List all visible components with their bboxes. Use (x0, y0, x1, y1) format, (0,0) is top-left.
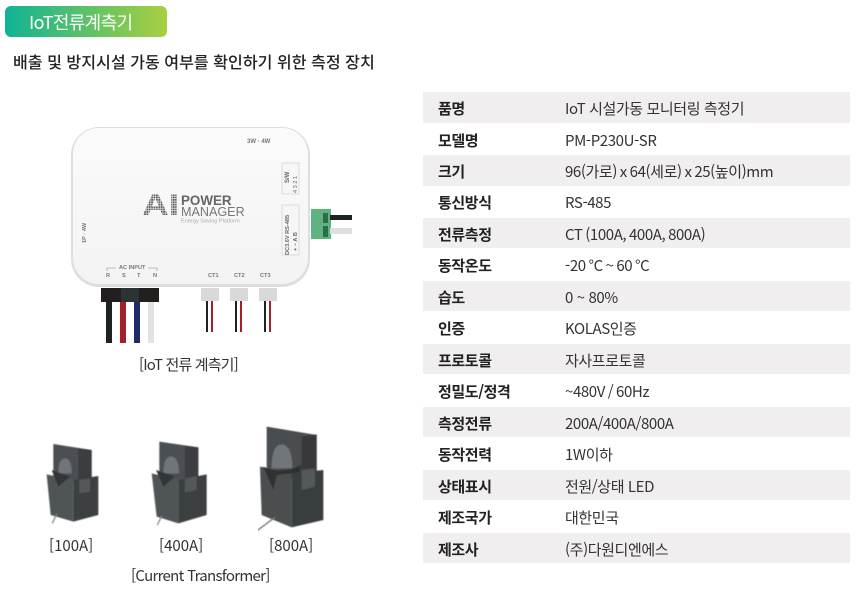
illustration: IoT current meter device: 1P · 4W (82, 222, 88, 243)
row: manufacturer: (주)다원디엔에스 (565, 538, 668, 560)
illustration: IoT current meter device: AI (142, 189, 179, 222)
caption: current transformer: [Current Transformer] (131, 565, 270, 586)
row: country of manufacture (438, 507, 619, 528)
row: certification: 인증 (438, 318, 465, 339)
row: measuring current (423, 407, 850, 437)
row: model: 모델명 (438, 130, 478, 150)
row: accuracy and rating (438, 381, 650, 402)
row: status display (423, 470, 850, 500)
row: operating power (438, 444, 612, 465)
icon: 400A current transformer (151, 441, 208, 526)
row: communication (438, 192, 611, 213)
illustration: IoT current meter device: + − A B (293, 232, 299, 251)
row: current measurement: 전류측정 (438, 224, 492, 245)
row: communication: 통신방식 (438, 192, 492, 213)
row: status display: 상태표시 (438, 476, 492, 496)
illustration: IoT current meter device: Energy Saving Platform (181, 218, 240, 224)
row: protocol: 자사프로토콜 (565, 350, 645, 371)
label: 100A: [100A] (49, 535, 93, 556)
illustration: IoT current meter device: N (153, 273, 157, 279)
row: humidity: 습도 (438, 287, 465, 308)
device caption: [IoT 전류 계측기] (139, 354, 238, 375)
label: 800A: [800A] (269, 535, 313, 556)
illustration: IoT current meter device: CT1 (208, 273, 219, 279)
illustration: IoT current meter device (71, 127, 352, 343)
row: current measurement: CT (100A, 400A, 800A) (565, 224, 705, 245)
row: size: 96(가로) x 64(세로) x 25(높이)mm (565, 161, 773, 182)
row: measuring current: 200A/400A/800A (565, 413, 673, 434)
specification table (423, 92, 850, 563)
row: certification (438, 318, 637, 339)
subtitle: 배출 및 방지시설 가동 여부를 확인하기 위한 측정 장치 (13, 49, 375, 73)
row: operating temperature: -20 °C ~ 60 °C (565, 255, 649, 276)
row: measuring current: 측정전류 (438, 413, 492, 434)
row: product name: IoT 시설가동 모니터링 측정기 (565, 98, 744, 119)
row: operating temperature: 동작온도 (438, 255, 492, 276)
row: current measurement (423, 218, 850, 248)
illustration: IoT current meter device: DC3.6V RS-485 (285, 215, 291, 255)
row: size (423, 155, 850, 186)
row: accuracy and rating: ~480V / 60Hz (565, 381, 649, 402)
row: model: PM-P230U-SR (565, 130, 656, 150)
row: product name: 품명 (438, 98, 465, 119)
row: manufacturer (423, 532, 850, 563)
row: product name (423, 92, 850, 122)
title badge: IoT전류계측기 (29, 9, 132, 35)
illustration: IoT current meter device: AC INPUT (119, 265, 146, 271)
illustration: IoT current meter device: R (106, 273, 110, 279)
row: humidity (423, 281, 850, 311)
icon: 800A current transformer (258, 426, 324, 532)
label: 400A: [400A] (159, 535, 203, 556)
illustration: IoT current meter device: CT3 (260, 273, 271, 279)
row: communication: RS-485 (565, 192, 611, 213)
row: operating power: 동작전력 (438, 444, 492, 465)
illustration: IoT current meter device: T (137, 273, 141, 279)
row: country of manufacture: 대한민국 (565, 507, 619, 528)
row: certification: KOLAS인증 (565, 318, 637, 339)
illustration: IoT current meter device: 3W · 4W (247, 139, 271, 145)
row: manufacturer: 제조사 (438, 538, 478, 560)
row: model (438, 130, 656, 150)
icon: 100A current transformer (46, 443, 100, 524)
illustration: IoT current meter device: MANAGER (181, 205, 245, 219)
row: status display: 전원/상태 LED (565, 476, 654, 496)
row: protocol: 프로토콜 (438, 350, 492, 371)
row: size: 크기 (438, 161, 465, 182)
row: protocol (423, 344, 850, 374)
illustration: IoT current meter device: S (122, 273, 126, 279)
title badge (5, 6, 167, 37)
row: country of manufacture: 제조국가 (438, 507, 492, 528)
illustration: IoT current meter device: 4 3 2 1 (293, 176, 299, 193)
row: accuracy and rating: 정밀도/정격 (438, 381, 510, 402)
row: operating power: 1W이하 (565, 444, 612, 465)
row: operating temperature (438, 255, 650, 276)
illustration: IoT current meter device: POWER (181, 193, 232, 208)
illustration: IoT current meter device: S/W (285, 171, 291, 183)
illustration: IoT current meter device: CT2 (234, 273, 245, 279)
row: humidity: 0 ~ 80% (565, 287, 618, 308)
